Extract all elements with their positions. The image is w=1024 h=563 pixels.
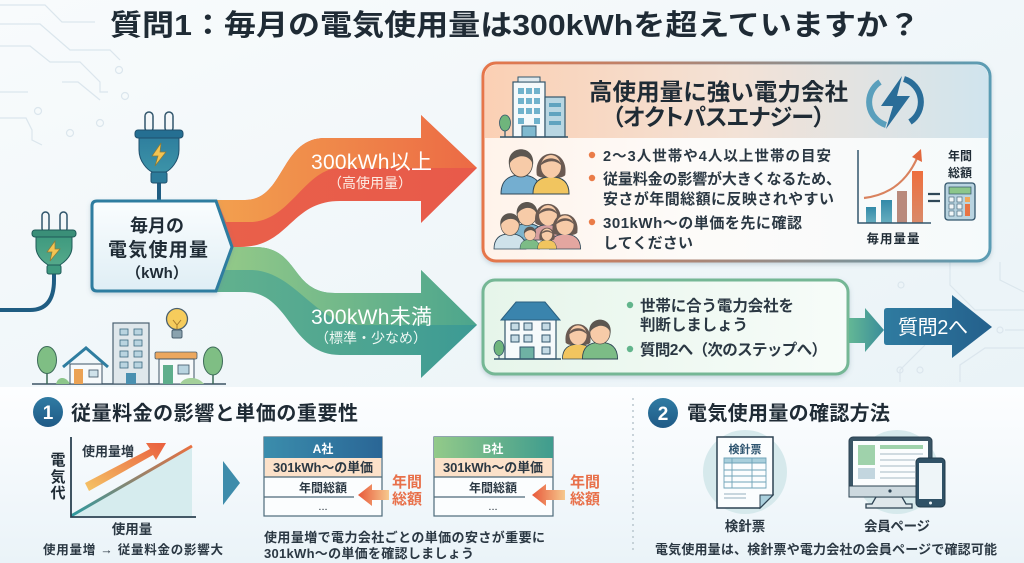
heading: card title: 高使用量に強い電力会社 — [589, 79, 848, 105]
chart: usage vs cost — [50, 437, 196, 537]
table: company A: 年間総額 — [299, 480, 347, 495]
chart: rising monthly usage — [858, 149, 931, 246]
icon: town with light bulb — [32, 308, 226, 384]
icon: couple — [562, 320, 618, 359]
text: card bullets: 301kWh〜の単価を先に確認 — [603, 214, 802, 232]
title: 質問1：毎月の電気使用量は300kWhを超えていますか？ — [110, 9, 920, 42]
icon: blue plug — [135, 112, 183, 200]
text: next-step bullets: 世帯に合う電力会社を — [640, 297, 794, 315]
callout: company B annual total — [532, 473, 600, 508]
panel: monthly usage box: 電気使用量 — [108, 239, 208, 261]
heading: card title: （オクトパスエナジー） — [612, 104, 825, 130]
text: card bullets: 2〜3人世帯や4人以上世帯の目安 — [603, 147, 831, 165]
heading: section 2: 2 — [658, 404, 668, 425]
chart: usage vs cost: 代 — [50, 485, 66, 502]
callout: company B annual total: 総額 — [570, 490, 600, 508]
label: member page: 会員ページ — [864, 519, 930, 534]
text: next-step bullets: 質問2へ（次のステップへ） — [640, 341, 827, 359]
label: under 300kWh: 300kWh未満 — [311, 306, 432, 329]
label: under 300kWh — [311, 306, 432, 346]
icon: household of two — [501, 149, 569, 194]
icon: member page devices — [849, 430, 945, 514]
chart: usage vs cost: 電 — [50, 452, 66, 469]
text: section 2 caption: 電気使用量は、検針票や電力会社の会員ページで確認可能 — [655, 542, 997, 557]
panel: monthly usage box: （kWh） — [126, 265, 188, 282]
chart: usage vs cost: 気 — [50, 468, 66, 486]
text: chart caption: 使用量増 → 従量料金の影響大 — [43, 542, 223, 557]
text: table caption: 301kWh〜の単価を確認しましょう — [264, 546, 474, 561]
chart: usage vs cost: 使用量 — [112, 521, 152, 537]
panel: section 1 metered charge impact — [33, 397, 600, 561]
callout: company A annual total: 総額 — [392, 490, 422, 508]
icon: equals calculator annual total: 年間 — [948, 148, 972, 163]
icon: large family — [494, 202, 581, 249]
table: company A: 301kWh〜の単価 — [273, 460, 373, 475]
arrow: question 2 button: 質問2へ — [898, 316, 968, 339]
text: card bullets — [589, 147, 841, 252]
heading: section 1: 1 — [43, 403, 54, 424]
chart: rising monthly usage: 毎用量量 — [866, 231, 920, 246]
text: card bullets: してください — [603, 235, 693, 252]
icon: meter reading slip — [703, 430, 787, 514]
arrow: to question 2 — [849, 308, 884, 352]
heading: section 1: 従量料金の影響と単価の重要性 — [71, 402, 358, 425]
callout: company A annual total — [358, 473, 422, 508]
label: 300kWh or more: 300kWh以上 — [311, 151, 432, 174]
heading: section 1 — [33, 397, 358, 427]
icon: meter reading slip: 検針票 — [728, 442, 762, 456]
panel: section 2 how to check usage — [648, 398, 997, 557]
table: company B: 301kWh〜の単価 — [443, 460, 543, 475]
icon: green plug — [0, 212, 76, 310]
icon: chevron — [223, 461, 240, 505]
panel: high-usage electricity company — [483, 63, 990, 261]
arrow: 300kWh or more — [217, 115, 477, 247]
table: company B — [434, 437, 553, 516]
heading: card title — [589, 79, 848, 130]
table: company A: ... — [318, 501, 328, 513]
label: 300kWh or more — [311, 151, 432, 191]
panel: monthly usage box — [92, 201, 232, 291]
text: table caption: 使用量増で電力会社ごとの単価の安さが重要に — [264, 530, 545, 545]
callout: company A annual total: 年間 — [392, 473, 422, 491]
table: company B: B社 — [483, 441, 503, 456]
icon: equals calculator annual total: 総額 — [948, 165, 972, 180]
text: card bullets: 安さが年間総額に反映されやすい — [603, 190, 834, 208]
icon: office building — [500, 77, 568, 137]
table: company B: ... — [488, 501, 498, 513]
table: company A — [264, 437, 382, 516]
text: table caption — [264, 530, 545, 561]
chart: usage vs cost: 使用量増 — [82, 444, 134, 459]
label: under 300kWh: （標準・少なめ） — [315, 330, 427, 346]
heading: section 2 — [648, 398, 890, 428]
icon: lightning logo — [869, 76, 921, 129]
panel: under 300kWh result — [483, 280, 848, 374]
label: meter reading slip: 検針票 — [725, 518, 765, 534]
text: next-step bullets: 判断しましょう — [640, 316, 748, 334]
heading: section 2: 電気使用量の確認方法 — [687, 402, 890, 425]
table: company B: 年間総額 — [469, 480, 517, 495]
text: next-step bullets — [627, 297, 827, 359]
label: 300kWh or more: （高使用量） — [328, 175, 412, 191]
callout: company B annual total: 年間 — [570, 473, 600, 491]
icon: house — [494, 302, 561, 359]
table: company A: A社 — [313, 441, 333, 456]
arrow: question 2 button — [884, 295, 992, 358]
icon: equals calculator annual total — [928, 148, 975, 220]
panel: monthly usage box: 毎月の — [130, 216, 184, 236]
arrow: under 300kWh — [217, 247, 477, 378]
text: card bullets: 従量料金の影響が大きくなるため、 — [603, 170, 841, 188]
